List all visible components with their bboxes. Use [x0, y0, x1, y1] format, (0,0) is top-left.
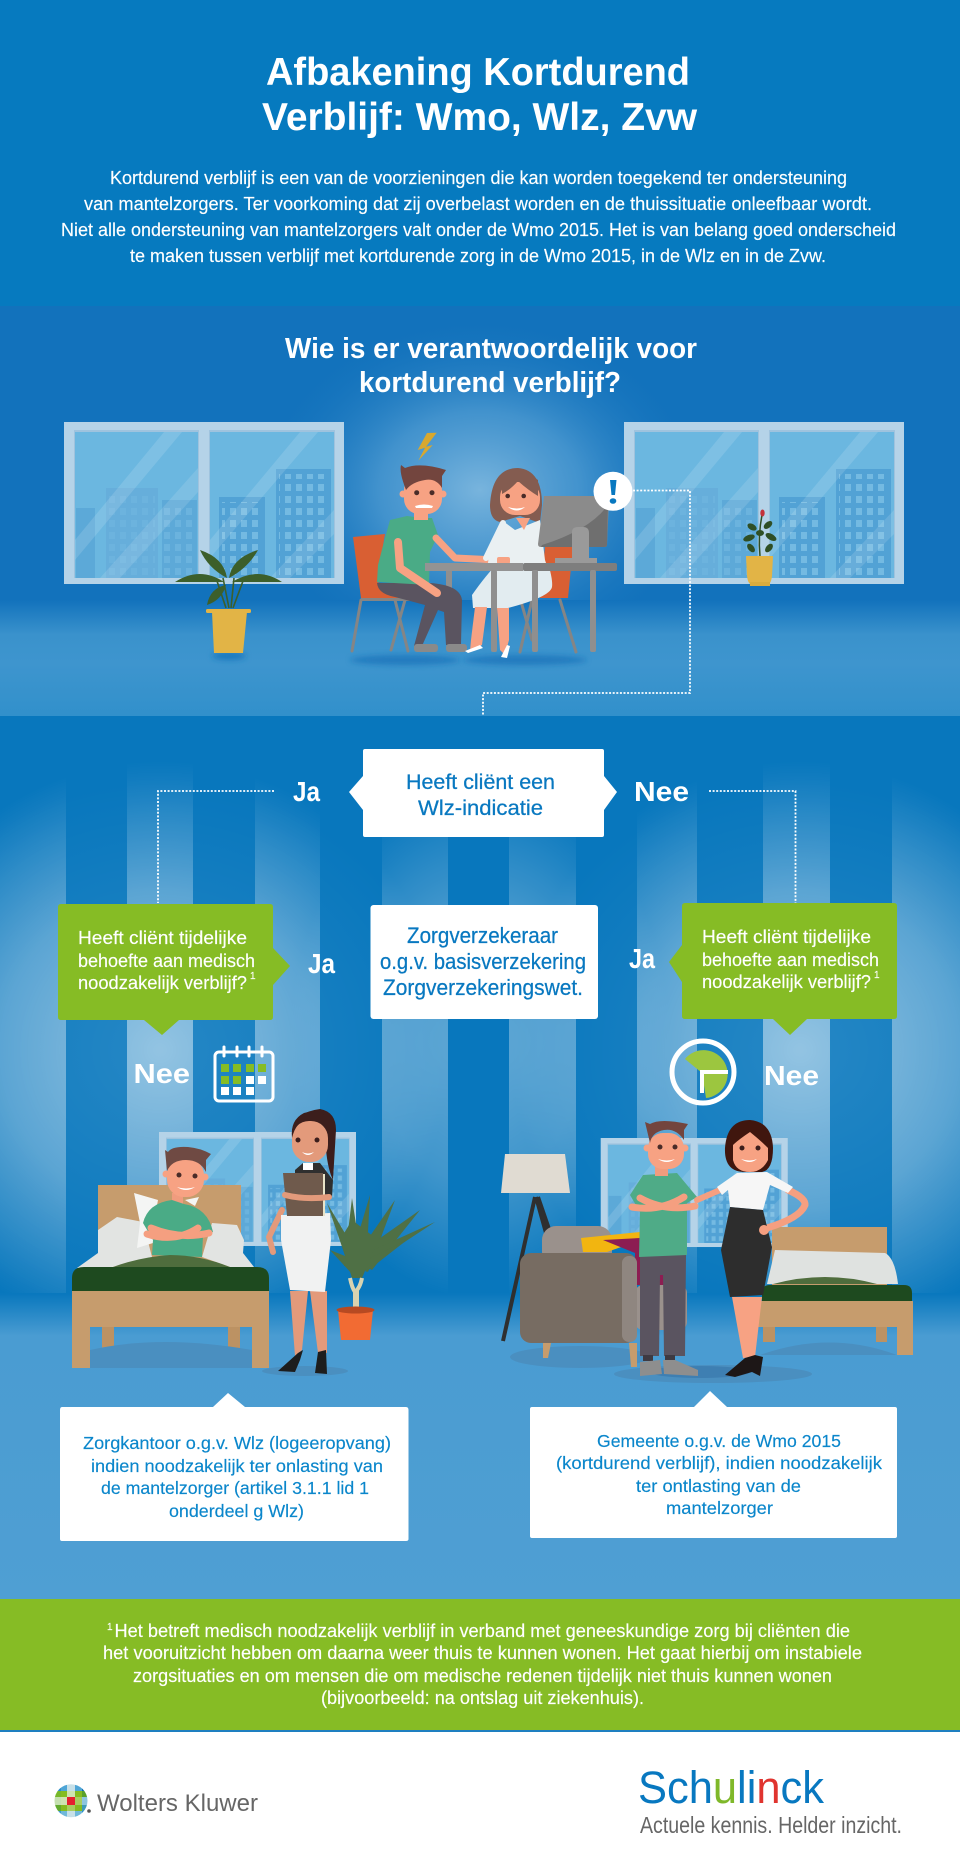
result box: Zorgverzekeraar: o.g.v. basisverzekering [380, 949, 586, 974]
question box green left [58, 904, 290, 1035]
arrow: dotted line left branch [158, 791, 274, 903]
label: Ja second right: Ja [629, 943, 655, 974]
arrow: dotted line right branch [709, 791, 796, 903]
result box: Gemeente: ter ontlasting van de [636, 1476, 801, 1496]
window right [624, 422, 904, 584]
bed right [745, 1227, 913, 1355]
desk [425, 563, 617, 652]
question box green left: 1 [250, 971, 256, 982]
title [262, 51, 698, 139]
question box: Wlz indication [349, 749, 617, 837]
woman [697, 1120, 805, 1377]
bed [72, 1185, 269, 1368]
arrow: dotted line from alert to question [483, 490, 690, 749]
result box: Zorgverzekeraar [370, 905, 598, 1019]
label: Nee lower right: Nee [764, 1060, 819, 1091]
desk back legs [446, 570, 452, 600]
result box: Zorgkantoor: Zorgkantoor o.g.v. Wlz (logeeropvang) [83, 1433, 391, 1453]
heading: who is responsible [285, 333, 697, 399]
result box: Zorgkantoor: onderdeel g Wlz) [169, 1501, 304, 1521]
footnote band: het vooruitzicht hebben om daarna weer thuis te kunnen wonen. Het gaat hierbij om instabiele [103, 1643, 862, 1663]
logo: Wolters Kluwer: Wolters Kluwer [97, 1790, 258, 1817]
label: Nee lower left: Nee [134, 1058, 190, 1089]
icon: calendar [215, 1047, 273, 1101]
question box green left: noodzakelijk verblijf? [78, 973, 247, 993]
question box green right: Heeft cliënt tijdelijke [702, 927, 871, 947]
footnote band: Het betreft medisch noodzakelijk verblijf in verband met geneeskundige zorg bij cliënten die [114, 1621, 850, 1641]
footnote band: (bijvoorbeeld: na ontslag uit ziekenhuis). [321, 1688, 644, 1708]
monitor [538, 496, 609, 563]
question box: Wlz indication: Heeft cliënt een [406, 771, 555, 794]
armchair [510, 1226, 687, 1368]
chair right [520, 547, 576, 652]
result box: Gemeente: (kortdurend verblijf), indien noodzakelijk [556, 1453, 882, 1473]
result box: Zorgkantoor: indien noodzakelijk ter onlasting van [91, 1456, 383, 1476]
logo: Schulinck: Actuele kennis. Helder inzicht. [640, 1812, 902, 1838]
result box: Zorgkantoor: de mantelzorger (artikel 3.1.1 lid 1 [101, 1478, 369, 1498]
logo: Wolters Kluwer [54, 1784, 258, 1818]
intro text: Niet alle ondersteuning van mantelzorgers valt onder de Wmo 2015. Het is van belang goed onderscheid [61, 219, 896, 240]
floor lamp [501, 1154, 570, 1341]
panel: decision tree background [0, 716, 960, 1600]
heading: who is responsible: Wie is er verantwoordelijk voor [285, 333, 697, 365]
intro text: van mantelzorgers. Ter voorkoming dat zij overbelast worden en de thuissituatie onleefbaar wordt. [84, 193, 872, 214]
illustration: man and doctor at desk [350, 433, 617, 665]
title: Verblijf: Wmo, Wlz, Zvw [262, 96, 698, 139]
intro text [61, 167, 896, 266]
question box green right: noodzakelijk verblijf? [702, 972, 871, 992]
logo: Schulinck: Schulinck [638, 1762, 824, 1813]
icon: large plant in yellow pot [175, 550, 282, 660]
woman with book [262, 1109, 348, 1376]
question box green right: 1 [874, 970, 880, 981]
result box: Gemeente [530, 1391, 897, 1538]
man [630, 1121, 698, 1376]
top header background [0, 0, 960, 306]
chair left [352, 534, 421, 651]
couple [614, 1120, 812, 1383]
icon: exclamation bubble [594, 472, 632, 511]
icon: lightning bolt [418, 433, 437, 461]
label: Ja second left: Ja [308, 948, 335, 979]
footnote band: 1 [107, 1622, 113, 1633]
footnote band [0, 1599, 960, 1732]
result box: Gemeente: Gemeente o.g.v. de Wmo 2015 [597, 1431, 841, 1451]
window left [64, 422, 344, 584]
illustration: bed scene left [72, 1109, 435, 1376]
plant with palm leaves [327, 1195, 435, 1340]
title: Afbakening Kortdurend [266, 51, 690, 94]
intro text: Kortdurend verblijf is een van de voorzieningen die kan worden toegekend ter ondersteuning [110, 167, 847, 188]
question box green left: Heeft cliënt tijdelijke [78, 928, 247, 948]
heading: who is responsible: kortdurend verblijf? [359, 367, 621, 399]
intro text: te maken tussen verblijf met kortdurende zorg in de Wmo 2015, in de Wlz en in de Zvw. [130, 245, 826, 266]
result box: Zorgkantoor [60, 1393, 408, 1541]
icon: small flower pot [742, 510, 778, 586]
label: Ja left: Ja [293, 776, 320, 807]
result box: Gemeente: mantelzorger [666, 1498, 773, 1518]
question box green left: behoefte aan medisch [78, 951, 255, 971]
label: Nee right: Nee [634, 776, 689, 807]
illustration: living room scene right [501, 1120, 913, 1383]
doctor [465, 468, 552, 658]
icon: clock [672, 1041, 734, 1103]
panel: office scene [0, 306, 960, 749]
footnote band: zorgsituaties en om mensen die om medische redenen tijdelijk niet thuis kunnen wonen [133, 1666, 832, 1686]
result box: Zorgverzekeraar: Zorgverzekeraar [407, 923, 558, 948]
footer background [0, 1732, 960, 1875]
man with stress [377, 465, 497, 652]
question box green right: behoefte aan medisch [702, 950, 879, 970]
question box green right [669, 903, 897, 1035]
question box: Wlz indication: Wlz-indicatie [418, 797, 543, 820]
result box: Zorgverzekeraar: Zorgverzekeringswet. [383, 975, 583, 1000]
logo: Schulinck [638, 1762, 902, 1838]
man in bed [113, 1147, 230, 1267]
